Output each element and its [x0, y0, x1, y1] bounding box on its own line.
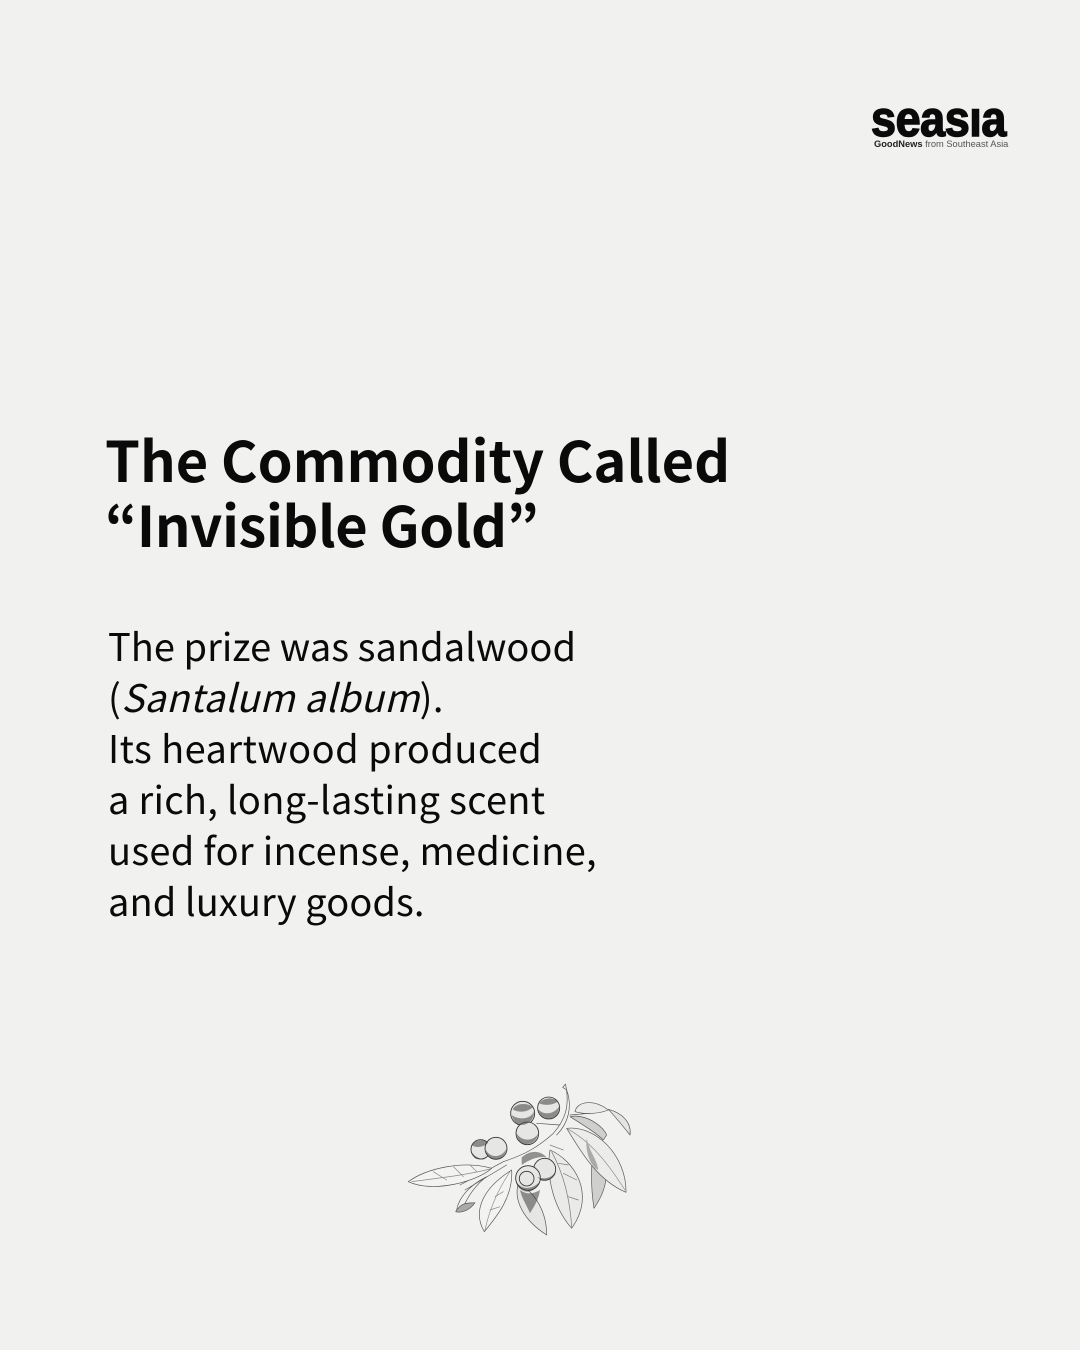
logo: seasia: [871, 91, 1008, 149]
stems: [460, 1084, 590, 1190]
body text: a rich, long-lasting scent: [108, 770, 545, 825]
body text: used for incense, medicine,: [108, 821, 597, 876]
leaves: [408, 1165, 492, 1186]
title: The Commodity Called: [105, 418, 730, 499]
body text: [108, 617, 597, 927]
title: [105, 418, 730, 564]
title: “Invisible Gold”: [105, 483, 538, 564]
body text: (Santalum album).: [108, 668, 444, 723]
berry shading: [472, 1098, 559, 1213]
body text: Its heartwood produced: [108, 719, 542, 774]
icon: sandalwood branch illustration: [408, 1084, 631, 1236]
berries: [471, 1097, 560, 1190]
body text: The prize was sandalwood: [108, 617, 576, 672]
logo tagline: GoodNews from Southeast Asia: [874, 139, 1008, 149]
logo wordmark: seasıa: [871, 91, 1006, 147]
body text: and luxury goods.: [108, 872, 424, 927]
